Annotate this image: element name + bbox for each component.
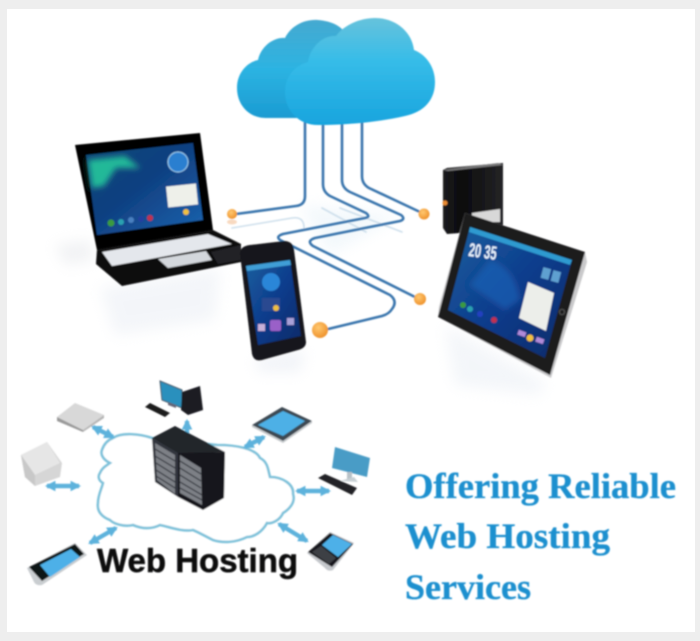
headline: offering reliable web hosting services: Offering Reliable [405, 466, 676, 506]
desktop computer [145, 381, 203, 417]
illustration: web hosting diagram [21, 381, 370, 585]
connector balls [227, 208, 430, 338]
tablet screen [448, 227, 572, 358]
floor reflections [55, 205, 545, 395]
monitor and keyboard [318, 447, 370, 495]
server box [21, 442, 62, 486]
label: web hosting: Web Hosting [97, 542, 298, 579]
headline: offering reliable web hosting services [405, 466, 676, 607]
smartphone right [307, 532, 354, 571]
laptop base [96, 230, 241, 286]
smartphone [240, 241, 306, 360]
tablet clock: 20 35 [467, 240, 498, 265]
laptop screen [75, 133, 213, 250]
external drive [442, 163, 503, 234]
cables from cloud to devices [232, 122, 420, 330]
cloud: back [237, 20, 346, 118]
headline: offering reliable web hosting services: Web Hosting [405, 516, 610, 556]
laptop [75, 133, 241, 286]
illustration: cloud network [75, 18, 587, 378]
hosting cloud outline [98, 434, 294, 542]
double arrows [47, 421, 329, 543]
smartphone left [27, 543, 87, 585]
server rack [152, 426, 225, 510]
tablet [438, 213, 587, 378]
cloud: front [285, 18, 435, 125]
headline: offering reliable web hosting services: Services [405, 567, 531, 607]
network router [57, 403, 104, 432]
tablet note card [519, 282, 554, 331]
tablet device [252, 407, 312, 443]
phone screen [246, 260, 301, 345]
